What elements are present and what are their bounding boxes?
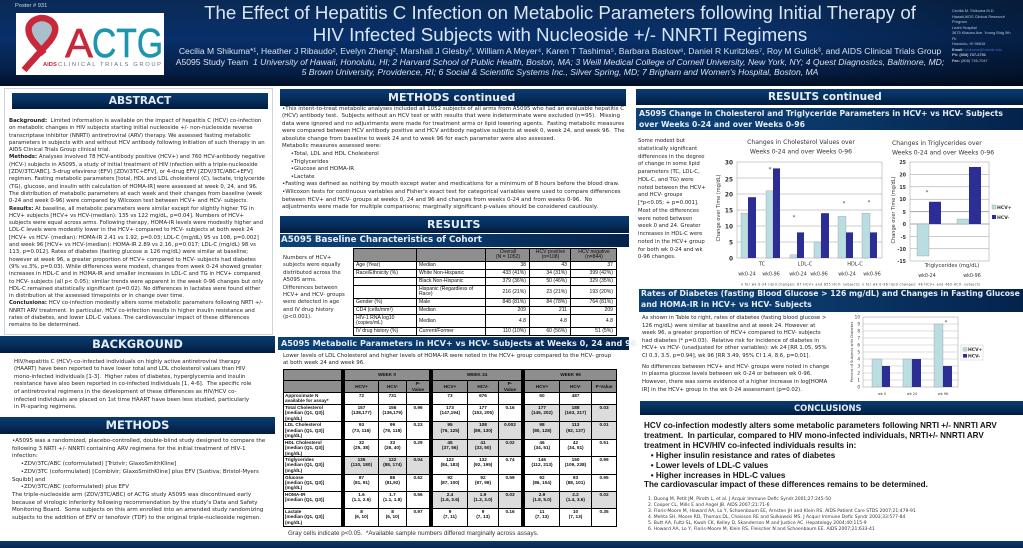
chart: changes in cholesterol: 20 bbox=[725, 192, 733, 198]
table: metabolic parameters: [median (Q1, Q3)] bbox=[285, 480, 324, 485]
table: metabolic parameters: 0.99 bbox=[599, 457, 609, 462]
table: metabolic parameters: WEEK 24 bbox=[467, 372, 487, 377]
table: metabolic parameters: HCV+ bbox=[444, 384, 456, 389]
heading: methods bbox=[0, 417, 275, 434]
table: metabolic parameters: HCV+ bbox=[355, 384, 368, 389]
table: metabolic parameters: available for assay* bbox=[285, 398, 329, 403]
table: metabolic parameters: (87, 100) bbox=[441, 480, 459, 485]
table: metabolic parameters: P- bbox=[416, 381, 420, 386]
table: metabolic parameters: 0.23 bbox=[413, 422, 423, 427]
heading: methods: METHODS bbox=[106, 418, 169, 432]
chart: changes in cholesterol: 0 bbox=[729, 256, 733, 262]
table: metabolic parameters: 1.7 bbox=[389, 492, 396, 497]
table: metabolic parameters: 0.002 bbox=[504, 422, 516, 427]
chart: changes in cholesterol: wk0-24 bbox=[789, 272, 807, 278]
table: metabolic parameters: (1.3, 3.0) bbox=[474, 497, 492, 502]
table: metabolic parameters: 2.4 bbox=[447, 492, 453, 497]
footer band bbox=[0, 541, 1023, 548]
table footnote: Gray cells indicate p<0.05. *Available sample numbers differed marginally across assays. bbox=[288, 530, 539, 536]
table: metabolic parameters: (6, 10) bbox=[355, 514, 368, 519]
chart: changes in cholesterol: TC bbox=[758, 262, 766, 268]
table: metabolic parameters: 1.6 bbox=[358, 492, 365, 497]
table: metabolic parameters: LDL Cholesterol bbox=[285, 422, 321, 427]
logo: ACTG: AIDS bbox=[43, 62, 57, 68]
table: metabolic parameters: [median (Q1, Q3)] bbox=[285, 497, 324, 502]
table: metabolic parameters: (89, 130) bbox=[474, 428, 492, 433]
table: metabolic parameters: (76, 125) bbox=[441, 428, 459, 433]
table: baseline characteristics: Median bbox=[419, 318, 436, 324]
chart: changes in cholesterol: wk0-96 bbox=[810, 272, 828, 278]
chart: changes in triglycerides: 5 bbox=[903, 210, 906, 216]
table: metabolic parameters: 0.97 bbox=[413, 509, 423, 514]
table: metabolic parameters: 135 bbox=[358, 457, 365, 462]
table: metabolic parameters: 0.29 bbox=[413, 440, 423, 445]
table: metabolic parameters: WEEK 96 bbox=[560, 372, 581, 377]
chart: changes in triglycerides: -10 bbox=[897, 247, 907, 253]
table: metabolic parameters: 146 bbox=[538, 457, 546, 462]
table: metabolic parameters: (112, 213) bbox=[531, 462, 553, 467]
table: metabolic parameters: (88, 101) bbox=[566, 480, 585, 485]
lipid change text: Some modest but statistically significant differences in the degree of change in some lipid parameters (TC, LDL-C, HDL-C, and TG) were noted between the HCV+ and HCV- groups [*p<0.05; + p=0.001]. Most of the differences were noted between week 0 and 24. Greater increases in HDL-C were noted in the HCV+ group for both wk 0-24 and wk 0-96 changes. bbox=[638, 138, 706, 260]
table: baseline characteristics: 193 (20%) bbox=[589, 289, 613, 295]
table: metabolic parameters: [median (Q1, Q3)] bbox=[285, 462, 324, 467]
heading: background: BACKGROUND bbox=[92, 337, 183, 351]
table: baseline characteristics: 60 (56%) bbox=[546, 328, 567, 334]
chart: changes in cholesterol: Changes in Cholesterol Values over bbox=[747, 139, 855, 146]
table: metabolic parameters: 0.04 bbox=[413, 457, 423, 462]
table: baseline characteristics: 34 (31%) bbox=[546, 270, 567, 276]
chart: changes in triglycerides: Weeks 0-24 and over Weeks 0-96 bbox=[892, 150, 994, 156]
table: metabolic parameters: 0.95 bbox=[599, 475, 609, 480]
chart: percent of subjects with diabetes: * bbox=[945, 320, 948, 326]
chart: changes in triglycerides bbox=[891, 140, 1012, 279]
heading: background bbox=[0, 336, 275, 353]
chart: changes in triglycerides: -15 bbox=[897, 259, 906, 265]
table: baseline characteristics: HCV negative bbox=[578, 249, 610, 255]
chart: percent of subjects with diabetes: 6 bbox=[857, 342, 860, 348]
table: metabolic parameters: 92 bbox=[480, 475, 486, 480]
chart: changes in triglycerides: wk0-96 bbox=[963, 273, 981, 279]
heading: conclusions bbox=[640, 401, 1023, 415]
chart: changes in triglycerides: Changes in Triglycerides over bbox=[892, 140, 982, 147]
chart: percent of subjects with diabetes: 9 bbox=[857, 322, 860, 326]
table: baseline characteristics: 4.8 bbox=[519, 318, 526, 324]
heading: results: RESULTS bbox=[427, 218, 480, 231]
table: metabolic parameters: HOMA-IR bbox=[285, 492, 306, 497]
table: metabolic parameters: P-Value bbox=[596, 384, 613, 389]
table: metabolic parameters: 156 bbox=[389, 405, 396, 410]
table: metabolic parameters: (33, 50) bbox=[475, 445, 491, 450]
chart: percent of subjects with diabetes: 8 bbox=[857, 328, 860, 334]
table: baseline characteristics: 4.8 bbox=[606, 318, 613, 324]
legend: triglyceride chart: HCV- bbox=[997, 215, 1009, 221]
table: metabolic parameters: 0.16 bbox=[505, 509, 515, 514]
chart: percent of subjects with diabetes: 0 bbox=[857, 384, 860, 390]
title: The Effect of Hepatitis C Infection on Metabolic Parameters following Initial Therapy of HIV Infected Subjects with Nucleoside +/- NNRTI Regimens bbox=[204, 2, 916, 45]
table: baseline characteristics: 848 (81%) bbox=[502, 299, 526, 305]
subheading: cholesterol and triglyceride change: A5095 Change in Cholesterol and Triglyceride Parameters in HCV+ vs HCV- Subjects over Weeks 0-24 and over Weeks 0-96 bbox=[639, 109, 1003, 129]
heading: results bbox=[280, 216, 629, 233]
abstract text: Background: Limited information is available on the impact of hepatitis C (HCV) co-infection on metabolic changes in HIV subjects starting initial nucleoside +/- non-nucleoside reverse transcriptase inhibitor (NNRTI) antiretroviral (ARV) therapy. We assessed fasting metabolic parameters in subjects with and without HCV antibody following initiation of such therapy in an AIDS Clinical Trials Group clinical trial. Methods: Analyses involved 78 HCV-antibody positive (HCV+) and 760 HCV-antibody negative (HCV-) subjects in A5095, a study of initial treatment of HIV infection with a triple-nucleoside [ZDV/3TC/ABC], 3-drug efavirenz (EFV) [ZDV/3TC+EFV], or 4-drug EFV [ZDV/3TC/ABC+EFV] regimen. Fasting metabolic parameters [total, HDL and LDL cholesterol (C), lactate, triglyceride (TG), glucose, and insulin with calculation of HOMA-IR] were assessed at week 0, 24, and 96. The distribution of metabolic parameters at each week and their changes from baseline (week 0-24 and week 0-96) were compared by Wilcoxon test between HCV+ and HCV- subjects. Results: At baseline, all metabolic parameters were similar except for slightly higher TG in HCV+ subjects [HCV+ vs HCV-(median): 135 vs 122 mg/dL, p=0.04]. Numbers of HCV+ subjects were equal across arms. Following therapy, HOMA-IR levels were modestly higher and LDL-C levels were modestly lower in the HCV+ compared to HCV- subjects at both week 24 [HCV+ vs HCV- (median): HOMA-IR 2.41 vs 1.92, p=0.03; LDL-C (mg/dL) 95 vs 108, p=0.002] and week 96 [HCV+ vs HCV-(median): HOMA-IR 2.89 vs 2.16, p=0.017; LDL-C (mg/dL) 98 vs 113, p=0.012]. Rates of diabetes (fasting glucose ≥ 126 mg/dL) were similar at baseline; however at week 96, a greater proportion of HCV+ compared to HCV- subjects had diabetes (9% vs.3%, p=0.03). While differences were modest, changes from week 0-24 showed greater increases in HDL-C and in HOMA-IR and smaller increases in LDL-C and TG in HCV+ compared to HCV- subjects (all p< 0.05); similar trends were apparent in the week 0-96 changes but only HDL-C remained statistically significant (p=0.02). No differences in lactates were found either in distribution at the assessed timepoints or in change over time. Conclusions: HCV co-infection modestly alters some metabolic parameters following NRTI +/- NNRTI ARV treatment. In particular, HCV co-infection results in higher insulin resistance and rates of diabetes, and lower LDL-C values. The cardiovascular impact of these differences remains to be determined. bbox=[9, 118, 265, 328]
chart: changes in triglycerides: 0 bbox=[903, 222, 907, 228]
chart: percent of subjects with diabetes: 7 bbox=[857, 336, 860, 340]
table: metabolic parameters: 50 bbox=[539, 393, 545, 398]
table: baseline characteristics: Gender (%) bbox=[356, 299, 382, 305]
chart: changes in cholesterol: wk0-24 bbox=[838, 272, 856, 278]
table: metabolic parameters: 487 bbox=[572, 393, 579, 398]
table: metabolic parameters: 72 bbox=[359, 393, 364, 398]
chart: percent of subjects with diabetes bbox=[850, 314, 983, 396]
table: metabolic parameters: [median (Q1, Q3)] bbox=[285, 514, 324, 519]
table: metabolic parameters: 0.96 bbox=[413, 405, 423, 410]
table: metabolic parameters: 93 bbox=[573, 475, 578, 480]
table: metabolic parameters: 0.01 bbox=[599, 422, 609, 427]
table: metabolic parameters: P- bbox=[508, 381, 512, 386]
table: metabolic parameters: (37, 56) bbox=[442, 445, 458, 450]
table: metabolic parameters: (78, 118) bbox=[383, 428, 402, 433]
table: metabolic parameters: 177 bbox=[479, 405, 487, 410]
table: metabolic parameters: (1.4, 3.6) bbox=[566, 497, 585, 502]
chart: percent of subjects with diabetes: 10 bbox=[855, 314, 860, 320]
table: metabolic parameters: 0.03 bbox=[599, 405, 609, 410]
chart: changes in cholesterol: 10 bbox=[725, 224, 733, 230]
table: baseline characteristics: 399 (42%) bbox=[589, 270, 613, 276]
header band bbox=[0, 0, 1023, 86]
chart: changes in triglycerides: 15 bbox=[899, 185, 906, 191]
table: metabolic parameters: 157 bbox=[358, 405, 365, 410]
table: metabolic parameters: (84, 183) bbox=[441, 462, 459, 467]
table: metabolic parameters: (163, 217) bbox=[565, 410, 586, 415]
table: metabolic parameters: 46 bbox=[539, 440, 545, 445]
table: metabolic parameters: (81, 91) bbox=[353, 480, 370, 485]
chart: percent of subjects with diabetes: 1 bbox=[857, 378, 860, 382]
contact details: Cecilia M. Shikuma M.D Hawaii AIDS Clinical Research Program Leahi Hospital 3675 Kilauea Ave. Young Bldg 5th Flr Honolulu, HI 96816 Email: shikuma@hawaii.edu Ph: (808) 737-2751 Fax: (808) 735-7047 bbox=[952, 8, 1011, 62]
legend: diabetes chart bbox=[961, 345, 983, 360]
table: metabolic parameters: (1.8, 5.0) bbox=[533, 497, 551, 502]
table: metabolic parameters: WEEK 0 bbox=[378, 372, 396, 377]
background text: HIV/hepatitis C (HCV)-co-infected individuals on highly active antiretroviral therapy (HAART) have been reported to have lower total and LDL cholesterol values than HIV mono-infected individuals [1-3]. Higher rates of diabetes, hyperglycemia and insulin resistance have also been reported in co-infected individuals [1, 4-6]. The specific role of antiretroviral regimens in the development of these differences as HIV/HCV co- infected individuals are placed on 1st time HAART have been less studied, particularly in PI-sparing regimens. bbox=[14, 358, 251, 410]
table: metabolic parameters: (147,194) bbox=[440, 410, 460, 415]
chart: changes in triglycerides: 25 bbox=[899, 160, 906, 166]
table: baseline characteristics: Current/Former bbox=[419, 328, 454, 334]
methods text: •A5095 was a randomized, placebo-controlled, double-blind study designed to compare the following 3 NRTI +/- NNRTI containing ARV regimens for the initial treatment of HIV-1 infection: •ZDV/3TC/ABC (coformulated) [Trizivir; GlaxoSmithKline] •ZDV/3TC (coformulated) [Combivir; GlaxoSmithKline] plus EFV [Sustiva; Bristol-Myers Squibb] and •ZDV/3TC/ABC (coformulated) plus EFV The triple-nucleoside arm (ZDV/3TC/ABC) of ACTG study A5095 was discontinued early because of virologic inferiority following recommendation by the study's Data and Safety Monitoring Board. Some subjects on this arm enrolled into an amended study randomizing subjects to the addition of EFV or tenofovir (TDF) to the original triple-nucleoside regimen. bbox=[12, 438, 265, 521]
chart: changes in cholesterol: wk0-96 bbox=[863, 272, 881, 278]
table: metabolic parameters: (mg/dL) bbox=[285, 433, 302, 438]
logo: ACTG: A bbox=[65, 20, 94, 66]
table: metabolic parameters: 0.35 bbox=[599, 509, 609, 514]
table: metabolic parameters: [median (Q1, Q3)] bbox=[285, 410, 324, 415]
poster number: Poster # 931 bbox=[15, 3, 47, 9]
heading: abstract: ABSTRACT bbox=[109, 95, 171, 107]
chart: changes in triglycerides: Change over Time (mg/dL) bbox=[891, 177, 897, 243]
table: metabolic parameters: 45 bbox=[447, 440, 453, 445]
chart: percent of subjects with diabetes: wk 96 bbox=[938, 392, 948, 396]
chart: changes in triglycerides: * bbox=[926, 190, 929, 196]
table: metabolic parameters: (73, 116) bbox=[352, 428, 371, 433]
chart: changes in triglycerides: -5 bbox=[901, 235, 906, 241]
table: baseline characteristics: Hispanic (Regardless of Race) bbox=[419, 286, 473, 297]
table: metabolic parameters: HCV- bbox=[477, 384, 489, 389]
table: metabolic parameters: (34, 51) bbox=[567, 445, 584, 450]
table: metabolic parameters: 95 bbox=[447, 422, 453, 427]
table: metabolic parameters: Total Cholesterol bbox=[285, 405, 323, 410]
table: metabolic parameters: (110, 180) bbox=[351, 462, 372, 467]
table: baseline characteristics: 50 (46%) bbox=[546, 278, 567, 284]
table: metabolic parameters: 108 bbox=[479, 422, 487, 427]
table: metabolic parameters: 0.02 bbox=[599, 492, 609, 497]
chart: changes in cholesterol: 5 bbox=[729, 240, 733, 246]
table: metabolic parameters: 177 bbox=[538, 405, 546, 410]
table: metabolic parameters: (7, 13) bbox=[535, 514, 549, 519]
table: metabolic parameters: 93 bbox=[359, 422, 364, 427]
table: metabolic parameters: HCV+ bbox=[536, 384, 548, 389]
chart: percent of subjects with diabetes: wk 0 bbox=[878, 392, 886, 396]
chart: percent of subjects with diabetes: 2 bbox=[857, 370, 860, 376]
table: metabolic parameters: 0.02 bbox=[505, 440, 515, 445]
table: metabolic parameters: 0.51 bbox=[599, 440, 609, 445]
chart: percent of subjects with diabetes: 3 bbox=[857, 364, 860, 368]
table: baseline characteristics: 379 (36%) bbox=[502, 278, 526, 284]
panel: abstract bbox=[4, 88, 273, 335]
chart: changes in triglycerides: 10 bbox=[899, 197, 907, 203]
table: metabolic parameters: (153, 205) bbox=[472, 410, 494, 415]
heading: results continued: RESULTS continued bbox=[768, 91, 882, 103]
table: metabolic parameters: 122 bbox=[389, 457, 396, 462]
logo: ACTG: CLINICAL TRIALS GROUP bbox=[58, 62, 161, 68]
table: metabolic parameters: (138,177) bbox=[351, 410, 372, 415]
table: metabolic parameters: (6, 10) bbox=[386, 514, 399, 519]
table: baseline characteristics: 84 (78%) bbox=[546, 299, 567, 305]
baseline side text: Numbers of HCV+ subjects were equally distributed across the A5095 arms. Differences between HCV+ and HCV- groups were detected in age and IV drug history (p<0.001). bbox=[283, 255, 345, 320]
table: metabolic parameters: Value bbox=[412, 386, 424, 392]
table: metabolic parameters: 0.59 bbox=[505, 475, 515, 480]
table: metabolic parameters: (mg/dL) bbox=[285, 520, 302, 525]
table: metabolic parameters: (87, 98) bbox=[475, 480, 491, 485]
subheading: rates of diabetes: Rates of Diabetes (fasting Blood Glucose > 126 mg/dL) and Changes in Fasting Glucose and HOMA-IR in HCV+ vs HCV- Subjects bbox=[641, 289, 1020, 308]
table: metabolic parameters: 8 bbox=[391, 509, 394, 514]
table: metabolic parameters: 9 bbox=[449, 509, 451, 514]
table: metabolic parameters: 2.2 bbox=[572, 492, 579, 497]
table: baseline characteristics: White Non-Hispanic bbox=[419, 270, 464, 276]
table: baseline characteristics: HIV-1 RNA log10 (copies/mL) bbox=[356, 315, 395, 326]
table: metabolic parameters: 99 bbox=[390, 422, 395, 427]
table: metabolic parameters: 188 bbox=[572, 405, 579, 410]
table: metabolic parameters: (92, 137) bbox=[566, 428, 585, 433]
chart: percent of subjects with diabetes: wk 24 bbox=[907, 392, 917, 396]
legend: diabetes chart: HCV- bbox=[968, 354, 980, 360]
table: baseline characteristics: Race/Ethnicity (%) bbox=[356, 270, 398, 276]
table: metabolic parameters: HCV- bbox=[570, 384, 581, 389]
table: metabolic parameters: 0.62 bbox=[413, 475, 423, 480]
table: baseline characteristics: Male bbox=[419, 299, 430, 305]
table: metabolic parameters: 1.9 bbox=[480, 492, 486, 497]
table: metabolic parameters: 9 bbox=[482, 509, 484, 514]
legend: triglyceride chart bbox=[992, 205, 1012, 221]
table: metabolic parameters: (mg/dL) bbox=[285, 451, 302, 456]
table: metabolic parameters: 88 bbox=[390, 475, 395, 480]
table: metabolic parameters: [median (Q1, Q3)] bbox=[285, 428, 324, 433]
table: baseline characteristics: HCV positive bbox=[536, 249, 565, 255]
table: metabolic parameters: (86, 104) bbox=[533, 480, 551, 485]
table: metabolic parameters: HCV- bbox=[387, 384, 398, 389]
legend: diabetes chart: HCV+ bbox=[968, 347, 983, 353]
chart: changes in cholesterol: 15 bbox=[725, 208, 733, 214]
chart: changes in cholesterol: LDL-C bbox=[798, 262, 813, 268]
subheading: metabolic parameters: A5095 Metabolic Parameters in HCV+ vs HCV- Subjects at Weeks 0, 24 and 96 bbox=[281, 338, 636, 348]
table: metabolic parameters: (80, 128) bbox=[533, 428, 551, 433]
table: baseline characteristics: 329 (35%) bbox=[589, 278, 613, 284]
table: baseline characteristics: IV drug history (%) bbox=[356, 328, 398, 334]
table: metabolic parameters: 92 bbox=[539, 475, 545, 480]
table: metabolic parameters: Approximate N bbox=[285, 393, 318, 398]
table: metabolic parameters: (1.1, 2.6) bbox=[352, 497, 371, 502]
table: metabolic parameters: (145, 202) bbox=[531, 410, 553, 415]
table: metabolic parameters: 173 bbox=[446, 405, 454, 410]
references: 1. Duong M, Petit JM, Piroth L, et al. J Acquir Immune Defic Syndr 2001;27:245-50 2. Cooper CL, Mills E and Angel JB. AIDS 2007;21:71-6 3. Floris-Moore M, Howard AA, Lo Y, Schoenbaum EE, Arnsten JH and Klein RS. AIDS Patient Care STDS 2007;21:479-91 4. Mehta SH, Moore RD, Thomas DL, Chaisson RE and Sulkowski MS. J Acquir Immune Defic Syndr 2003;33:577-84 5. Butt AA, Fultz SL, Kwoh CK, Kelley D, Skanderson M and Justice AC. Hepatology 2004;40:115-9 6. Howard AA, Lo Y, Floris-Moore M, Klein RS, Fleischer N and Schoenbaum EE. AIDS 2007;21:633-41 bbox=[648, 497, 916, 532]
table: metabolic parameters: (mg/dL) bbox=[285, 468, 302, 473]
chart: changes in cholesterol: * bbox=[868, 200, 871, 206]
table: metabolic parameters: 150 bbox=[572, 457, 579, 462]
table: metabolic parameters: 113 bbox=[572, 422, 579, 427]
table: metabolic parameters: HDL Cholesterol bbox=[285, 440, 322, 445]
table: metabolic parameters: 0.74 bbox=[505, 457, 515, 462]
subheading: baseline characteristics bbox=[280, 234, 629, 247]
logo: ACTG bbox=[16, 13, 164, 75]
chart: changes in triglycerides: 20 bbox=[899, 172, 907, 178]
table: baseline characteristics: 4.8 bbox=[560, 318, 567, 324]
conclusions text: HCV co-infection modestly alters some metabolic parameters following NRTI +/- NNRTI ARV treatment. In particular, compared to HIV mono-infected individuals, NRTI+/- NNRTI ARV treatment in HCV/HIV co-infected individuals results in: • Higher insulin resistance and rates of diabetes • Lower levels of LDL-C values • Higher increases in HDL-C values The cardiovascular impact of these differences remains to be determined. bbox=[644, 421, 997, 489]
table: metabolic parameters: Triglycerides bbox=[285, 457, 314, 462]
table: baseline characteristics: 110 (10%) bbox=[503, 328, 526, 334]
table: baseline characteristics bbox=[353, 248, 617, 336]
metabolic intro text: Lower levels of LDL Cholesterol and higher levels of HOMA-IR were noted in the HCV+ group compared to the HCV- group at both week 24 and week 96. bbox=[283, 352, 611, 366]
table: metabolic parameters: (7, 13) bbox=[476, 514, 490, 519]
table: metabolic parameters: (7, 11) bbox=[443, 514, 457, 519]
table: metabolic parameters: (109, 238) bbox=[565, 462, 586, 467]
table: metabolic parameters: 132 bbox=[479, 457, 487, 462]
subheading: baseline characteristics: A5095 Baseline Characteristics of Cohort bbox=[281, 235, 482, 245]
table: metabolic parameters: 0.56 bbox=[413, 492, 423, 497]
chart: changes in cholesterol: 30 bbox=[725, 160, 733, 166]
table: metabolic parameters: 32 bbox=[359, 440, 364, 445]
table: metabolic parameters: (1.6, 3.6) bbox=[441, 497, 459, 502]
table: metabolic parameters: 0.03 bbox=[505, 492, 515, 497]
methods continued text: •This intent-to-treat metabolic analyses included all 1052 subjects of all arms from A5095 who had an evaluable hepatitis C (HCV) antibody test. Subjects without an HCV test or with results that were indeterminate were excluded (n=95). Missing data were ignored and no adjustments were made for treatment arms or lipid lowering agents. Fasting metabolic measures were compared between HCV antibody positive and HCV antibody negative subjects at week 0, week 24, and week 96. The absolute change from baseline to week 24 and to week 96 for each parameter were also assessed. Metabolic measures assessed were: •Total, LDL and HDL Cholesterol •Triglycerides •Glucose and HOMA-IR •Lactate •Fasting was defined as nothing by mouth except water and medications for a minimum of 8 hours before the blood draw. •Wilcoxon tests for continuous variables and Fisher's exact test for categorical variables were used to compare differences between HCV+ and HCV- groups at weeks 0, 24 and 96 and changes from weeks 0-24 and from weeks 0-96. No adjustments were made for multiple comparisons; marginally significant p-values should be considered cautiously. bbox=[282, 106, 625, 210]
table: baseline characteristics: 216 (21%) bbox=[502, 289, 526, 295]
chart: changes in cholesterol: * bbox=[793, 215, 796, 221]
table: baseline characteristics: 23 (21%) bbox=[546, 289, 567, 295]
chart: percent of subjects with diabetes: 5 bbox=[857, 350, 860, 354]
table: baseline characteristics: (n=108) bbox=[542, 254, 559, 260]
heading: conclusions: CONCLUSIONS bbox=[794, 403, 862, 413]
table: metabolic parameters: 42 bbox=[573, 440, 578, 445]
table: metabolic parameters: 98 bbox=[539, 422, 545, 427]
authors and affiliations: Cecilia M Shikuma*¹, Heather J Ribaudo², Evelyn Zheng², Marshall J Glesby³, William A Meyer⁴, Karen T Tashima⁵, Barbara Bastow⁶, Daniel R Kuritzkes⁷, Roy M Gulick³, and AIDS Clinical Trials Group A5095 Study Team 1 University of Hawaii, Honolulu, HI; 2 Harvard School of Public Health, Boston, MA; 3 Weill Medical College of Cornell University, New York, NY; 4 Quest Diagnostics, Baltimore, MD; 5 Brown University, Providence, RI; 6 Social & Scientific Systems Inc., Silver Spring, MD; 7 Brigham and Women's Hospital, Boston, MA bbox=[176, 46, 944, 77]
table: baseline characteristics: Overall bbox=[500, 249, 516, 255]
chart: changes in cholesterol: 25 bbox=[725, 178, 733, 184]
table: metabolic parameters: 676 bbox=[479, 393, 487, 398]
glucose and HOMA text: No differences between HCV+ and HCV- groups were noted in change in plasma glucose levels between wk 0-24 or between wk 0-96. However, there was some evidence of a higher increase in log[HOMA IR] in the HCV+ group in the wk 0-24 assessment (p=0.02). bbox=[642, 364, 829, 393]
chart: changes in triglycerides: wk0-24 bbox=[918, 273, 936, 279]
diabetes text: As shown in Table to right, rates of diabetes (fasting blood glucose > 126 mg/dL) were similar at baseline and at week 24. However at week 96, a greater proportion of HCV+ compared to HCV- subjects had diabetes (* p=0.03). Relative risk for incidence of diabetes in HCV+ vs HCV- (unadjusted for other variables): wk 24 [RR 1.05, 95% CI 0.3, 3.5, p=0.94], wk 96 [RR 3.49, 95% CI 1.4, 8.6, p=0.01]. bbox=[642, 315, 827, 359]
table: metabolic parameters: (mg/dL) bbox=[285, 416, 302, 421]
chart: changes in cholesterol: Change over Time (mg/dL) bbox=[716, 175, 722, 241]
table: baseline characteristics: 433 (41%) bbox=[502, 270, 526, 276]
table: baseline characteristics: (N = 1052) bbox=[496, 254, 520, 260]
chart: changes in cholesterol: Weeks 0-24 and over Weeks 0-96 bbox=[750, 148, 852, 156]
table: metabolic parameters: 0.16 bbox=[505, 405, 515, 410]
chart: percent of subjects with diabetes: Percent of Subjects with Diabetes bbox=[850, 322, 854, 382]
table: metabolic parameters: Value bbox=[504, 386, 516, 392]
table: metabolic parameters: (7, 13) bbox=[569, 514, 582, 519]
chart: changes in triglycerides: Triglycerides (mg/dL) bbox=[924, 263, 979, 269]
table: baseline characteristics: Black Non-Hispanic bbox=[419, 278, 463, 284]
table: metabolic parameters: 33 bbox=[390, 440, 395, 445]
chart footnote: n for wk 0-24 lipid changes: 87 HCV+ and 655 HCV- subjects; n for wk 0-96 lipid changes: 48 HCV+ and 463 HCV- subjects bbox=[741, 282, 980, 286]
table: metabolic parameters: (mg/dL) bbox=[285, 485, 302, 490]
table: metabolic parameters: (26, 40) bbox=[384, 445, 401, 450]
heading: methods continued: METHODS continued bbox=[388, 91, 515, 104]
table: metabolic parameters: (88, 174) bbox=[383, 462, 402, 467]
table: metabolic parameters: (1.1, 1.8) bbox=[383, 497, 402, 502]
chart: changes in cholesterol: * bbox=[769, 167, 772, 173]
table: metabolic parameters: 87 bbox=[359, 475, 364, 480]
table: metabolic parameters: [median (Q1, Q3)] bbox=[285, 445, 324, 450]
table: metabolic parameters: 73 bbox=[447, 393, 453, 398]
chart: percent of subjects with diabetes: 4 bbox=[857, 356, 860, 362]
table: metabolic parameters: (34, 51) bbox=[534, 445, 550, 450]
table: metabolic parameters: (25, 38) bbox=[353, 445, 370, 450]
table: baseline characteristics: 51 (5%) bbox=[595, 328, 613, 334]
chart: changes in cholesterol: HDL-C bbox=[847, 262, 863, 268]
chart: changes in cholesterol bbox=[716, 139, 882, 278]
chart: changes in cholesterol: wk0-96 bbox=[762, 272, 780, 278]
table: metabolic parameters: 731 bbox=[389, 393, 396, 398]
heading: abstract bbox=[12, 93, 268, 109]
table: metabolic parameters: 2.9 bbox=[539, 492, 545, 497]
table: metabolic parameters: (136,179) bbox=[382, 410, 403, 415]
chart: changes in cholesterol: * bbox=[843, 201, 846, 207]
table: metabolic parameters: (81,92) bbox=[385, 480, 400, 485]
table: baseline characteristics: 764 (81%) bbox=[589, 299, 613, 305]
table: metabolic parameters: 8 bbox=[360, 509, 363, 514]
table: metabolic parameters: 41 bbox=[480, 440, 486, 445]
table: metabolic parameters: 122 bbox=[446, 457, 454, 462]
table: metabolic parameters: Glucose bbox=[285, 475, 304, 480]
table: metabolic parameters: Lactate bbox=[285, 509, 301, 514]
legend: triglyceride chart: HCV+ bbox=[997, 205, 1012, 211]
chart: changes in cholesterol: wk0-24 bbox=[738, 272, 756, 278]
table: metabolic parameters: 11 bbox=[540, 509, 545, 514]
table: metabolic parameters: (92, 195) bbox=[474, 462, 492, 467]
heading: methods continued bbox=[280, 89, 626, 106]
heading: results continued bbox=[636, 89, 1023, 105]
table: metabolic parameters: 10 bbox=[573, 509, 578, 514]
table: metabolic parameters bbox=[283, 369, 617, 527]
table: baseline characteristics: (n=844) bbox=[585, 254, 603, 260]
table: metabolic parameters: 92 bbox=[447, 475, 453, 480]
